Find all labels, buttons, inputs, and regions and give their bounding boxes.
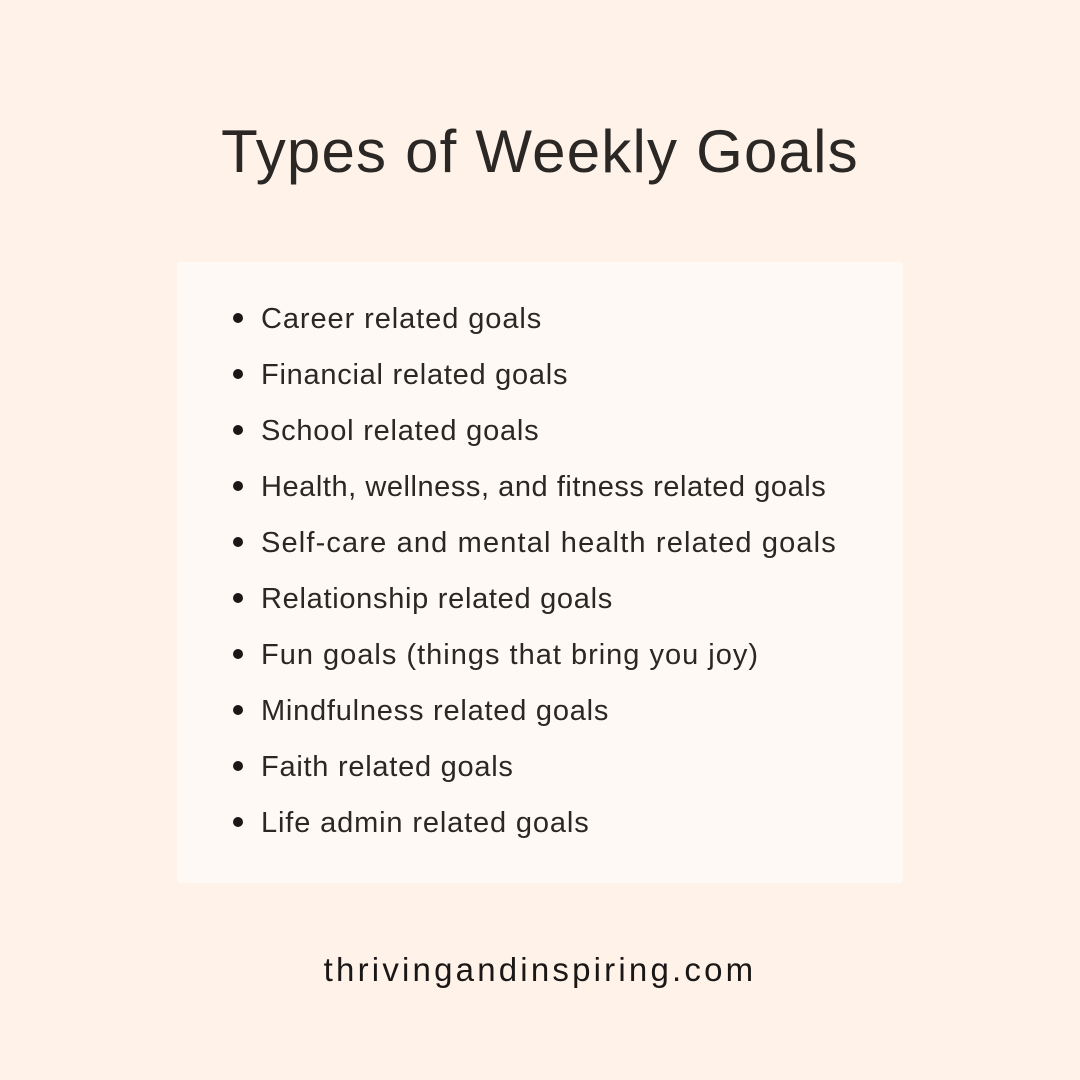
list item: career: Career related goals: [261, 303, 542, 335]
footer website: thrivingandinspiring.com: [324, 951, 756, 988]
title: Types of Weekly Goals: [221, 118, 859, 185]
list item: self-care: Self-care and mental health related goals: [261, 527, 837, 559]
list item: fun: Fun goals (things that bring you joy): [261, 639, 759, 671]
list item: financial: Financial related goals: [261, 359, 568, 391]
panel: goals list: [177, 262, 903, 883]
list item: mindfulness: Mindfulness related goals: [261, 695, 609, 727]
list item: health: Health, wellness, and fitness related goals: [261, 471, 826, 503]
list item: life admin: Life admin related goals: [261, 807, 590, 839]
list item: faith: Faith related goals: [261, 751, 514, 783]
list item: school: School related goals: [261, 415, 539, 447]
list item: relationship: Relationship related goals: [261, 583, 613, 615]
